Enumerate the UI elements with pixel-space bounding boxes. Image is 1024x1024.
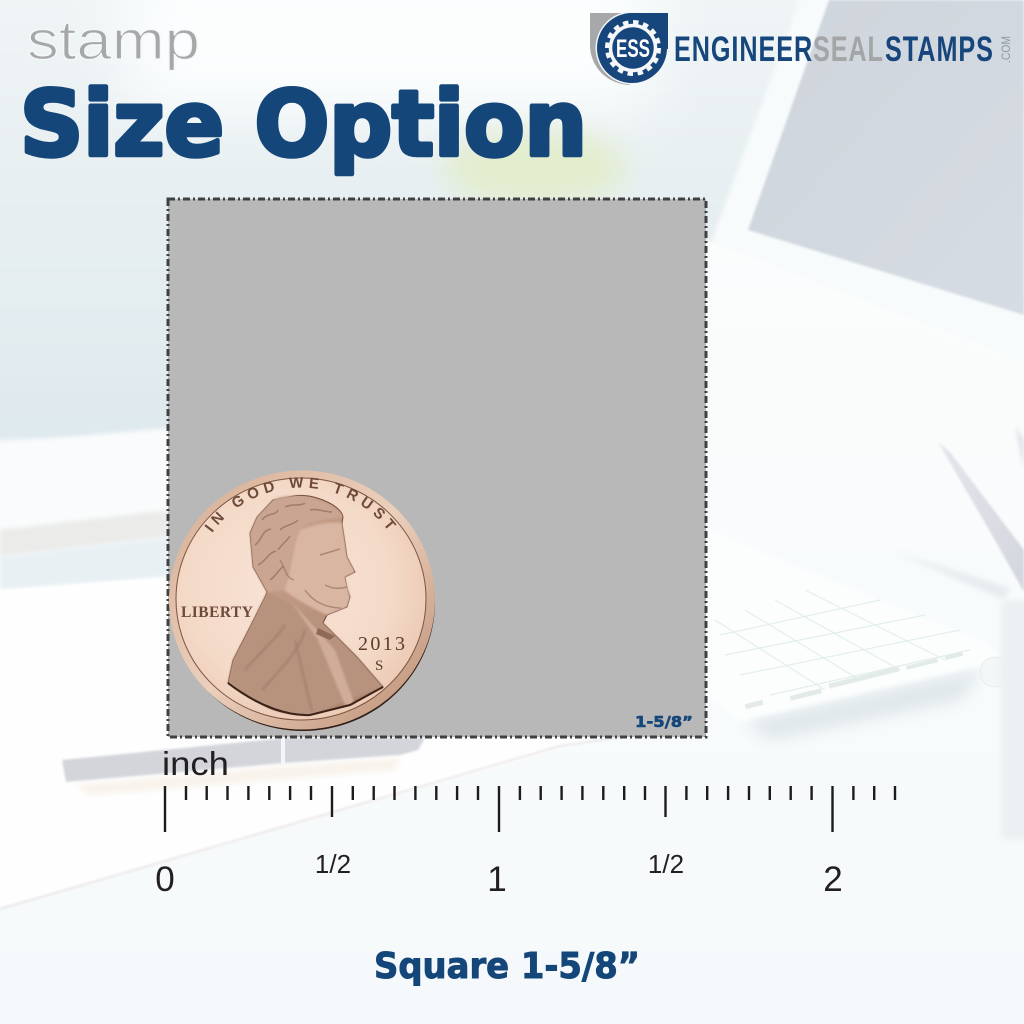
desk surface	[0, 240, 1024, 1024]
logo	[590, 12, 1013, 85]
monitor bezel	[712, 0, 1024, 362]
window shelf	[0, 428, 170, 590]
logo wordmark: STAMPS	[885, 30, 993, 69]
coin motto: IN GOD WE TRUST	[204, 477, 396, 532]
ruler numbers: 0	[155, 860, 175, 899]
coin liberty inscription: LIBERTY	[181, 604, 253, 621]
stamp label small heading: stamp	[27, 9, 200, 71]
stamp size square	[168, 199, 706, 737]
white paper sheet	[0, 560, 700, 908]
logo wordmark	[674, 30, 1013, 69]
paper edge	[0, 737, 622, 909]
icon: blurred plant	[443, 130, 627, 206]
coin date: 2013	[358, 633, 405, 655]
logo wordmark: ENGINEER	[674, 30, 812, 69]
size label in square: 1-5/8”	[635, 713, 693, 731]
icon: pen	[62, 738, 425, 795]
ruler numbers: 1	[487, 860, 507, 899]
ruler unit label: inch	[162, 745, 229, 782]
size caption: Square 1-5/8”	[374, 946, 640, 987]
ruler numbers: 2	[823, 860, 843, 899]
icon: keyboard	[706, 530, 1010, 740]
logo emblem	[590, 12, 668, 85]
logo emblem: ESS	[616, 35, 650, 63]
logo wordmark: SEAL	[813, 30, 883, 69]
logo wordmark: .COM	[999, 36, 1013, 63]
coin mint mark: S	[375, 658, 383, 674]
ruler ticks	[165, 786, 895, 832]
ruler numbers: 1/2	[648, 849, 684, 879]
ruler numbers: 1/2	[315, 849, 351, 879]
title: Size Option	[20, 72, 587, 177]
Lincoln bust	[228, 495, 383, 715]
ruler numbers	[155, 849, 843, 899]
penny coin	[169, 470, 435, 731]
monitor screen	[748, 0, 1024, 315]
icon: pencils and cup	[895, 425, 1024, 840]
